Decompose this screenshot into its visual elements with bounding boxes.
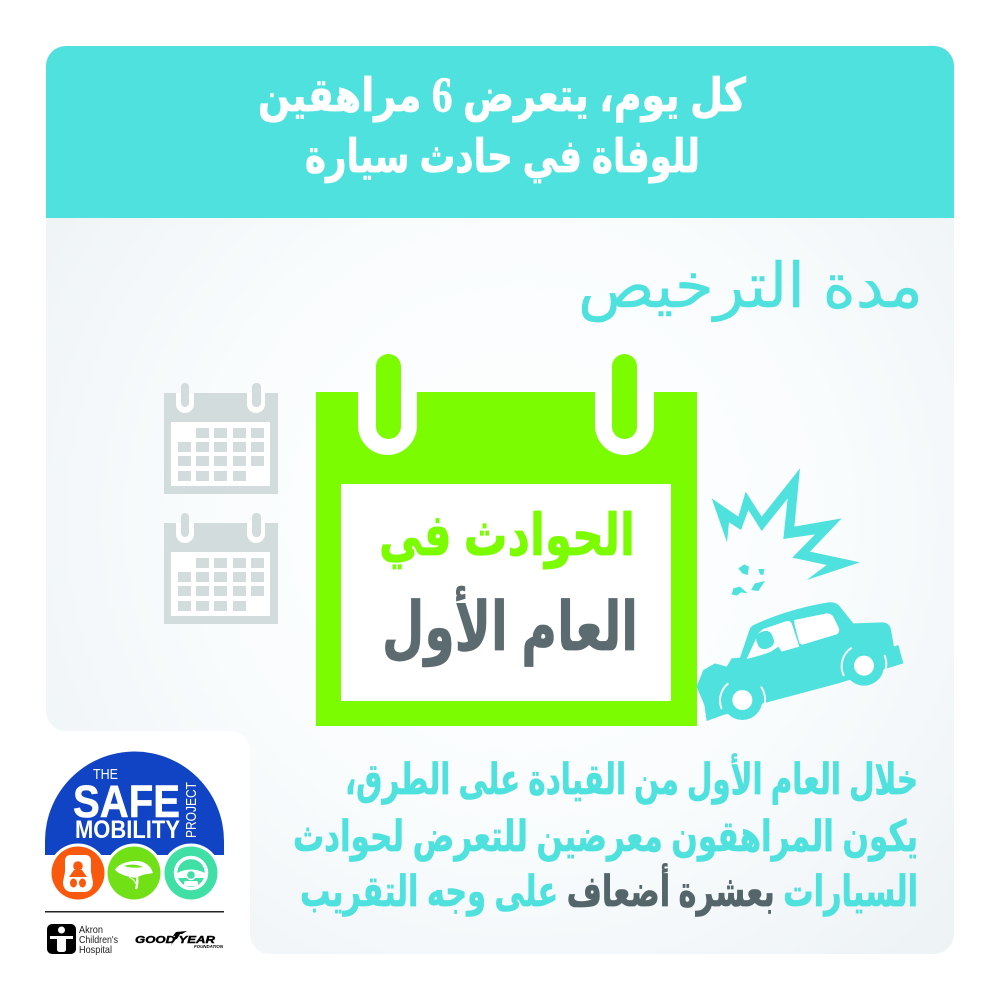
logo dome (45, 751, 224, 855)
icon: crashed car (697, 602, 903, 721)
title: للوفاة في حادث سيارة (305, 130, 700, 183)
body text: السيارات بعشرة أضعاف على وجه التقريب (300, 863, 918, 917)
logo: Goodyear Foundation: GOOD YEAR (135, 934, 216, 946)
calendar text: first year: العام الأول (382, 585, 638, 667)
logo: Akron Children's Hospital: Akron (79, 924, 103, 936)
calendar text: crashes in: الحوادث في (379, 503, 635, 570)
icon: small calendar 1 (164, 383, 278, 494)
logo: Goodyear Foundation: FOUNDATION (194, 944, 224, 949)
logo: Safe Mobility Project (45, 751, 224, 956)
logo wordmark: SAFE (73, 776, 180, 827)
logo wordmark: PROJECT (183, 782, 200, 838)
heading: licensing period: مدة الترخيص (578, 252, 923, 322)
title: كل يوم، يتعرض 6 مراهقين (258, 66, 746, 122)
logo icon: helmet (104, 844, 164, 902)
logo wordmark: MOBILITY (75, 816, 180, 844)
panel: header band (46, 46, 954, 218)
logo divider (45, 911, 224, 912)
logo wordmark: THE (93, 766, 118, 783)
body text (293, 753, 918, 917)
logo icon: steering wheel (162, 844, 220, 902)
large calendar (316, 354, 697, 726)
logo icon: car seat (48, 844, 108, 902)
icon: impact burst (712, 468, 860, 596)
logo: Goodyear Foundation (135, 931, 224, 949)
title (258, 66, 746, 183)
icon: small calendar 2 (164, 513, 278, 624)
logo wordmark (73, 766, 200, 844)
logo: Akron Children's Hospital (47, 924, 118, 956)
logo: Akron Children's Hospital: Children's (79, 934, 118, 946)
logo: Akron Children's Hospital: Hospital (79, 944, 112, 956)
